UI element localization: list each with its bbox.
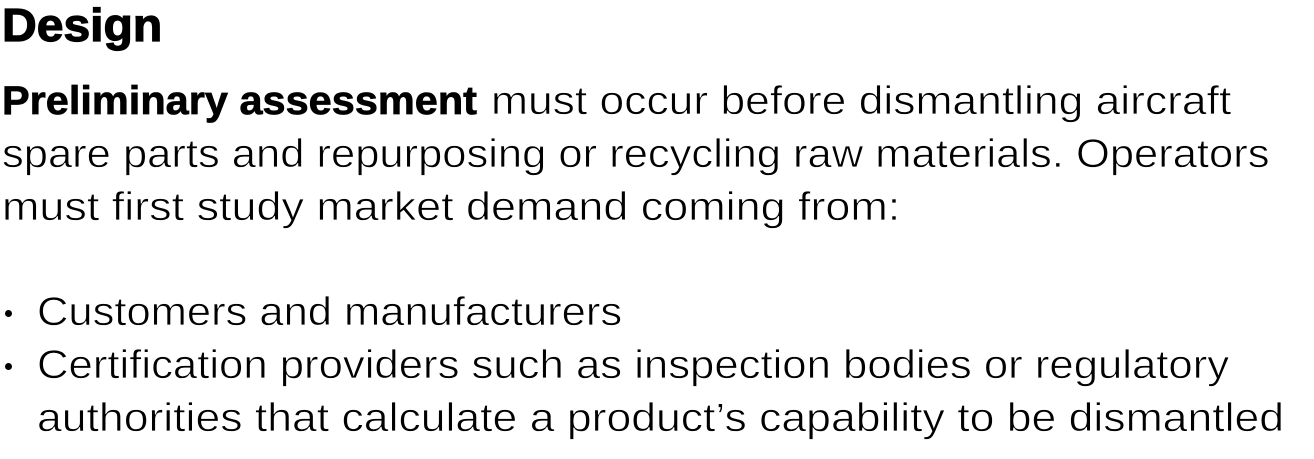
bullet list: Customers and manufacturers [37, 290, 622, 334]
text block: intro paragraph: must first study market demand coming from: [2, 185, 900, 229]
text block: intro paragraph: Preliminary assessment [2, 79, 477, 123]
bullet list: Certification providers such as inspection bodies or regulatory [37, 343, 1229, 387]
text block: intro paragraph [2, 79, 1269, 229]
bullet list: authorities that calculate a product’s capability to be dismantled [37, 396, 1284, 440]
bullet list [5, 290, 1284, 440]
text block: intro paragraph: must occur before dismantling aircraft [491, 79, 1231, 123]
heading: Design [2, 0, 162, 51]
text block: intro paragraph: spare parts and repurposing or recycling raw materials. Operators [2, 132, 1269, 176]
